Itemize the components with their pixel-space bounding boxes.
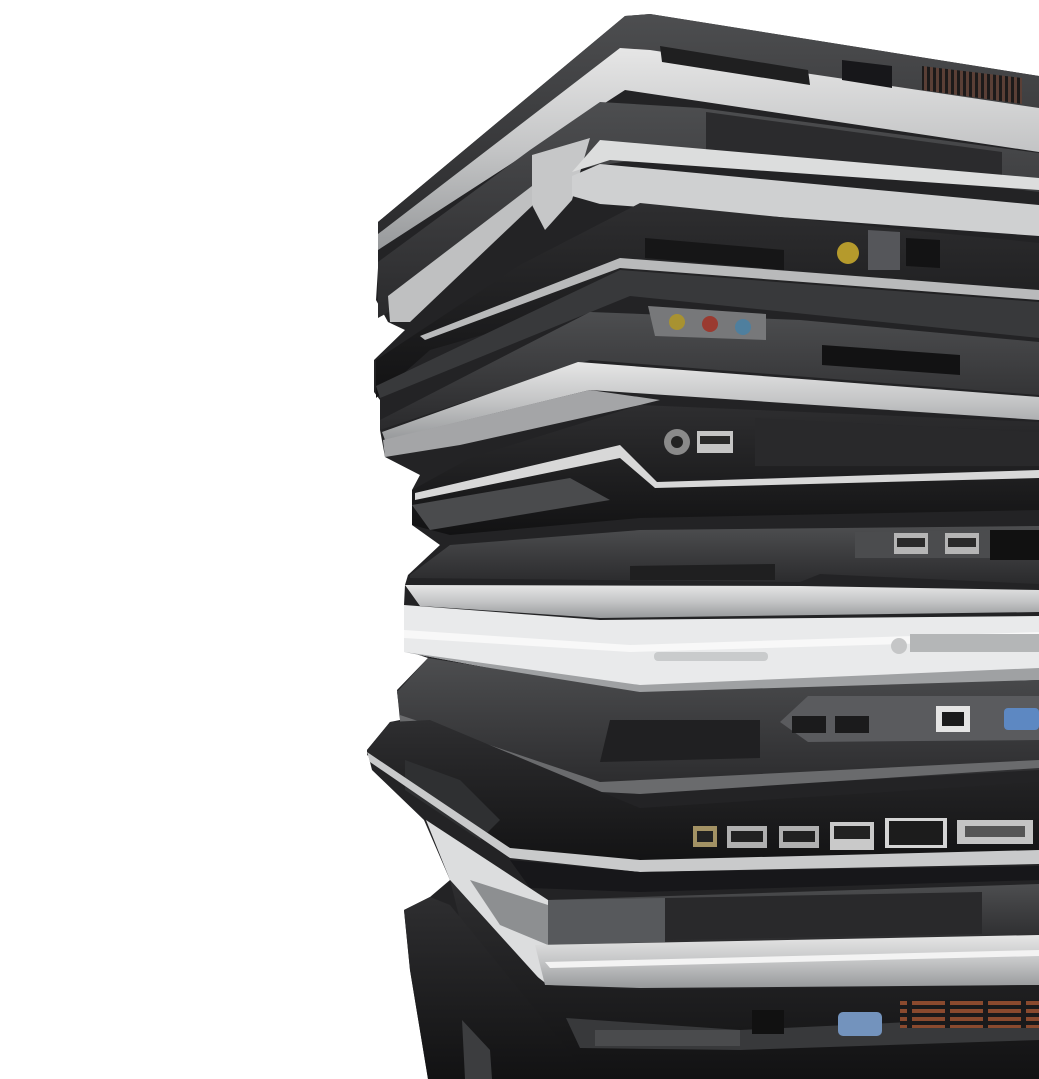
- laptop 6: [405, 526, 1039, 618]
- laptop 5: [412, 405, 1039, 535]
- laptop 10: [426, 820, 1039, 988]
- laptop 7: [404, 605, 1039, 696]
- icon: yellow s-video port: [837, 242, 859, 264]
- laptop 9: [367, 720, 1039, 892]
- laptop 12: [404, 897, 590, 1079]
- stack silhouette: [367, 14, 1039, 1079]
- laptop 1: [378, 14, 1039, 250]
- laptop 3: [376, 203, 1039, 398]
- laptop 8: [397, 658, 1039, 794]
- laptop 11: [450, 880, 1039, 1079]
- laptop 4: [380, 306, 1039, 457]
- laptop 2: [378, 102, 1039, 322]
